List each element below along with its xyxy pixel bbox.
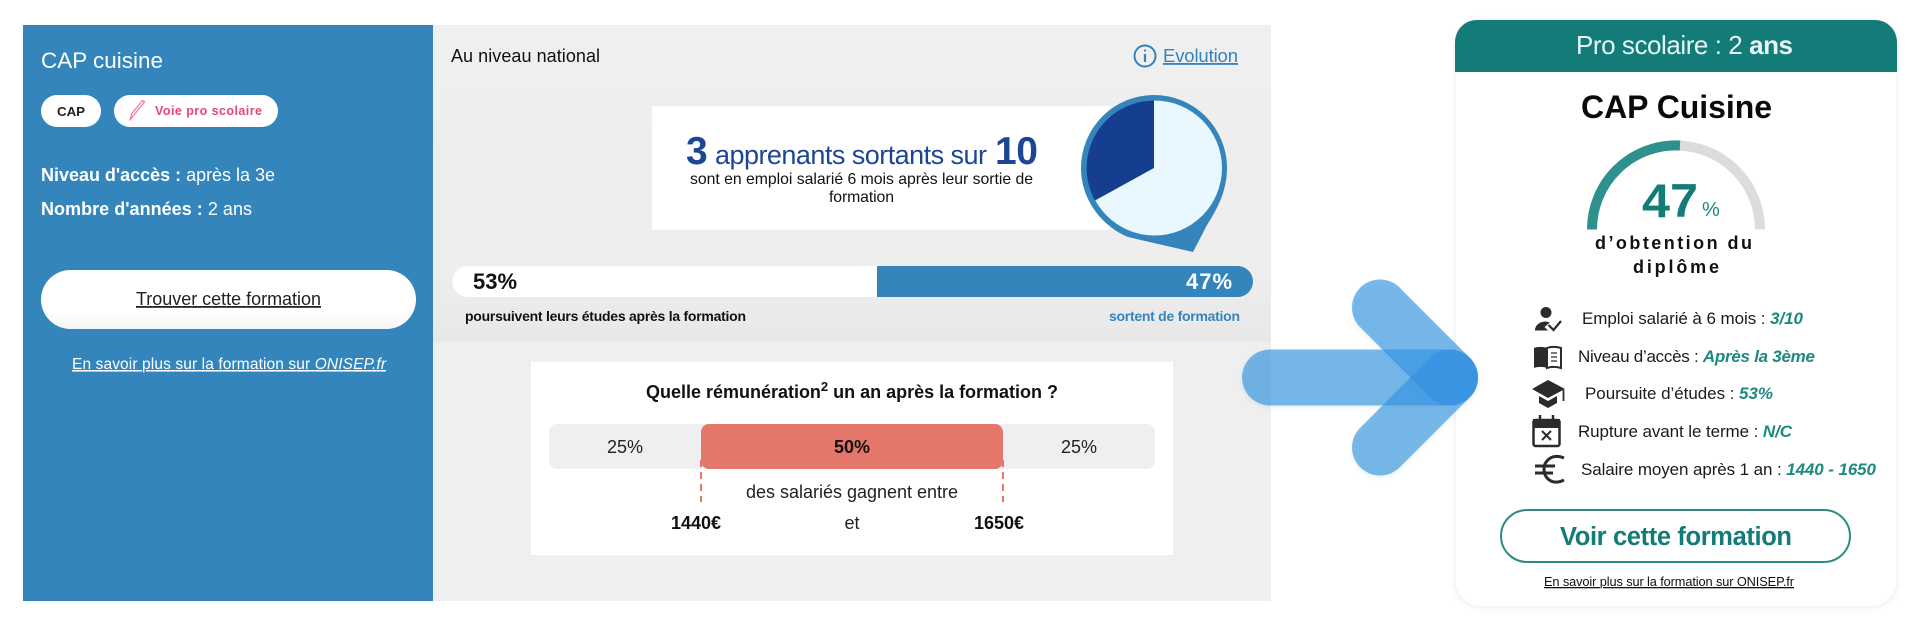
icon: calendar x [1533,415,1560,446]
callout: 3 apprenants sur 10: formation [829,189,894,206]
icon: info [1134,46,1156,66]
icon: person check [1535,307,1561,330]
text: d'obtention du diplôme [1595,233,1752,277]
heading: CAP Cuisine: CAP Cuisine [1581,89,1772,125]
text: nombre d'années: Nombre d'années : 2 ans [41,199,252,219]
heading: rémunération: Quelle rémunération2 un an après la formation ? [646,378,1058,402]
icon: book [1534,347,1561,368]
label: sortent: sortent de formation [1109,308,1240,324]
tag: CAP: CAP [57,104,85,119]
icon: pencil [130,100,144,120]
callout: 3 apprenants sur 10: sont en emploi salarié 6 mois après leur sortie de [690,171,1033,188]
button: voir cette formation [1501,510,1850,562]
button: trouver cette formation: Trouver cette formation [136,289,321,309]
chart: gauge 47%: 47 [1642,174,1698,227]
callout: 3 apprenants sur 10: apprenants sortants sur [715,140,987,170]
header: pro scolaire 2 ans [1455,20,1897,72]
label: au niveau national: Au niveau national [451,46,600,66]
link: onisep: En savoir plus sur la formation sur ONISEP.fr [72,356,387,373]
tag: Voie pro scolaire [114,95,278,127]
arrow: right [1270,308,1450,448]
text: niveau d'accès: Niveau d'accès : après la 3e [41,165,275,185]
chart: progress bar 53/47 [452,266,1253,297]
chart: salary range: et [844,513,860,533]
heading: CAP cuisine: CAP cuisine [41,48,163,73]
row: salaire [1535,456,1877,482]
chart: salary range: 25% [1061,437,1097,457]
callout: 3 apprenants sur 10 [652,106,1110,230]
panel: rémunération [531,362,1173,555]
chart: salary range: 25% [607,437,643,457]
callout: 3 apprenants sur 10: 3 [686,130,708,173]
chart: salary range: des salariés gagnent entre [746,482,958,502]
chart: salary range [549,424,1155,533]
link: evolution: Evolution [1163,45,1238,66]
button: trouver cette formation [41,270,416,329]
tag: CAP [41,95,101,127]
chart: salary range: 50% [834,437,870,457]
text: d'obtention du diplôme: d’obtention du [1595,233,1752,253]
callout: 3 apprenants sur 10: 10 [995,130,1038,173]
chart: pie pin 3 sur 10 [1081,95,1227,252]
row: emploi salarié: Emploi salarié à 6 mois : 3/10 [1582,309,1804,328]
card: pro scolaire [1455,20,1897,607]
chart: gauge 47%: % [1702,199,1720,221]
tag: Voie pro scolaire: Voie pro scolaire [155,104,262,118]
row: emploi salarié [1535,307,1804,330]
row: poursuite d'études: Poursuite d’études : 53% [1585,384,1773,403]
row: rupture: Rupture avant le terme : N/C [1578,422,1793,441]
label: poursuivent: poursuivent leurs études après la formation [465,308,746,324]
icon: euro [1535,456,1564,482]
text: d'obtention du diplôme: diplôme [1633,257,1719,277]
chart: progress bar 53/47: 47% [1186,269,1232,294]
panel: national statistics [433,25,1271,601]
chart: gauge 47% [1592,145,1760,230]
row: niveau d'accès: Niveau d’accès : Après la 3ème [1578,347,1815,366]
chart: progress bar 53/47: 53% [473,269,517,294]
row: rupture [1533,415,1793,446]
link: onisep: En savoir plus sur la formation sur ONISEP.fr [1544,574,1795,589]
icon: graduation cap [1532,380,1565,408]
panel: formation summary [23,25,433,601]
chart: salary range: 1650€ [974,513,1024,533]
row: poursuite d'études [1532,380,1773,408]
header: pro scolaire 2 ans: Pro scolaire : 2 ans [1576,30,1793,60]
chart: salary range: 1440€ [671,513,721,533]
button: voir cette formation: Voir cette formation [1560,523,1792,551]
row: salaire: Salaire moyen après 1 an : 1440 - 1650 [1581,460,1877,479]
